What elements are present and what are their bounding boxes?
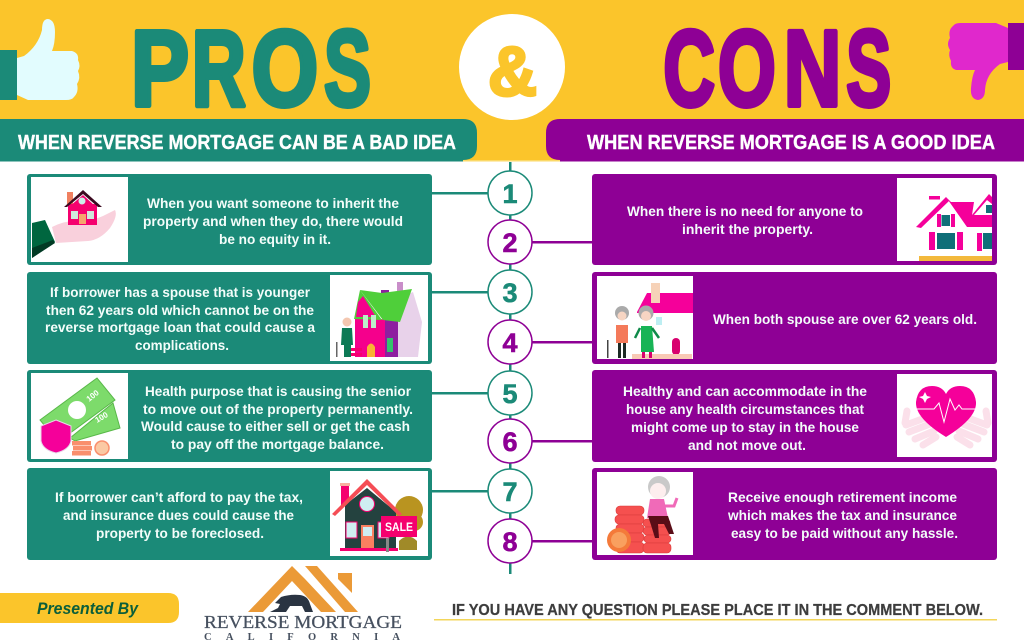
text: pro 3: to pay off the mortgage balance. — [171, 436, 384, 452]
logo: Reverse Mortgage California: CALIFORNIA — [204, 632, 400, 643]
panel: con 3 — [592, 370, 997, 462]
icon: house for sale — [332, 479, 423, 552]
number 4 — [488, 320, 532, 364]
title: CONS: C — [663, 8, 715, 128]
icon: money and shield: 100 — [85, 388, 101, 404]
ampersand badge: & — [488, 32, 537, 110]
header band — [0, 0, 1024, 162]
text: con 1: inherit the property. — [682, 221, 813, 237]
number 2 — [488, 220, 532, 264]
text: con 3: Healthy and can accommodate in the — [623, 383, 867, 399]
heading bar: pros — [0, 119, 477, 160]
text: pro 4 — [55, 489, 303, 541]
icon: money and shield — [40, 378, 120, 456]
text: pro 1 — [143, 195, 403, 247]
icon: thumbs up — [0, 19, 80, 100]
text: con 3: and not move out. — [688, 437, 806, 453]
text: pro 3 — [141, 383, 413, 452]
panel: con 2 — [592, 272, 997, 364]
footer call to action: IF YOU HAVE ANY QUESTION PLEASE PLACE IT IN THE COMMENT BELOW. — [452, 602, 983, 619]
number 5: 5 — [502, 379, 518, 409]
number 4: 4 — [502, 328, 518, 358]
text: con 4 — [727, 489, 958, 541]
logo: Reverse Mortgage California — [204, 566, 402, 643]
text: con 1 — [627, 203, 863, 237]
text: pro 2: then 62 years old which cannot be on the — [46, 302, 314, 318]
text: pro 2: complications. — [135, 337, 229, 353]
text: con 3: might come up to stay in the house — [631, 419, 859, 435]
text: pro 2 — [45, 284, 315, 353]
number 7 — [488, 469, 532, 513]
text: con 4: Receive enough retirement income — [728, 489, 957, 505]
panel: con 4 — [592, 468, 997, 560]
text: con 3 — [623, 383, 867, 453]
number 3: 3 — [502, 278, 518, 308]
icon: pink-roofed house — [916, 194, 992, 261]
text: pro 1: be no equity in it. — [219, 231, 331, 247]
text: pro 4: property to be foreclosed. — [96, 525, 264, 541]
title: PROS: S — [324, 8, 371, 128]
title: CONS: N — [784, 8, 841, 128]
text: con 4: easy to be paid without any hassle. — [731, 525, 958, 541]
number 3 — [488, 270, 532, 314]
number 2: 2 — [502, 228, 518, 258]
panel: pro 2 — [27, 272, 432, 364]
number 1 — [488, 171, 532, 215]
text: pro 1: property and when they do, there would — [143, 213, 403, 229]
title: PROS: O — [252, 8, 318, 128]
presented by pill — [0, 593, 179, 623]
number 8: 8 — [502, 527, 518, 557]
number 6 — [488, 419, 532, 463]
icon: heart in hands — [905, 386, 988, 445]
text: con 1: When there is no need for anyone to — [627, 203, 863, 219]
number 6: 6 — [502, 427, 518, 457]
icon: senior sitting on coins — [607, 476, 677, 553]
text: pro 4: and insurance dues could cause the — [63, 507, 294, 523]
central timeline — [432, 162, 592, 574]
text: con 3: house any health circumstances that — [626, 401, 864, 417]
text: con 4: which makes the tax and insurance — [727, 507, 957, 523]
number 1: 1 — [502, 179, 518, 209]
icon: thumbs down — [948, 23, 1024, 100]
text: pro 4: If borrower can’t afford to pay the tax, — [55, 489, 303, 505]
text: pro 1: When you want someone to inherit the — [147, 195, 399, 211]
icon: elderly couple and house — [607, 283, 693, 359]
title: CONS: S — [846, 8, 891, 128]
number 7: 7 — [502, 477, 518, 507]
panel: pro 1 — [27, 174, 432, 265]
text: con 2: When both spouse are over 62 years old. — [713, 311, 977, 327]
text: pro 3: Would cause to either sell or get the cash — [141, 418, 410, 434]
icon: house on hand — [32, 190, 116, 258]
title: PROS — [131, 8, 371, 128]
title: CONS — [663, 8, 891, 128]
title: PROS: R — [192, 8, 246, 128]
panel: con 1 — [592, 174, 997, 265]
text: pro 3: to move out of the property permanently. — [143, 401, 413, 417]
ampersand badge — [459, 14, 565, 120]
text: pro 2: If borrower has a spouse that is younger — [50, 284, 311, 300]
number 5 — [488, 371, 532, 415]
presented by pill: Presented By — [37, 599, 139, 618]
icon: money and shield: 100 — [94, 410, 110, 425]
icon: house for sale: SALE — [385, 522, 413, 534]
number 8 — [488, 519, 532, 563]
title: CONS: O — [718, 8, 776, 128]
text: pro 2: reverse mortgage loan that could cause a — [45, 319, 315, 335]
heading bar: pros: WHEN REVERSE MORTGAGE CAN BE A BAD IDEA — [18, 131, 456, 154]
heading bar: cons — [546, 119, 1024, 160]
text: pro 3: Health purpose that is causing the senior — [145, 383, 412, 399]
panel: pro 3 — [27, 370, 432, 462]
panel: pro 4 — [27, 468, 432, 560]
logo: Reverse Mortgage California: REVERSE MORTGAGE — [204, 612, 402, 632]
icon: colourful house with senior — [336, 282, 422, 357]
title: PROS: P — [131, 8, 189, 128]
